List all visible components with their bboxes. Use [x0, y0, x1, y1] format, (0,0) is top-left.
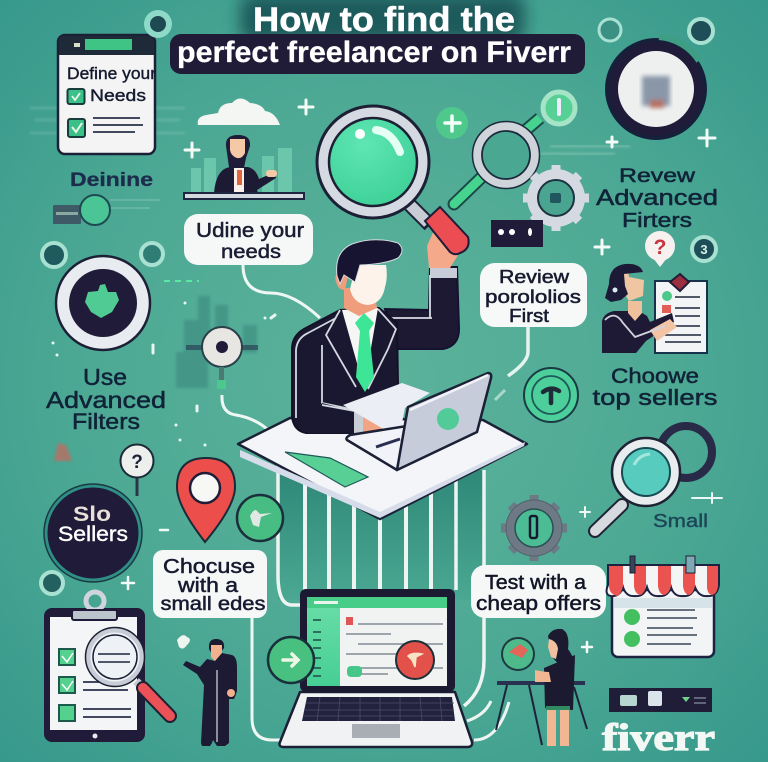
title line one: How to find the — [253, 1, 515, 39]
text: use advanced filters: Filters — [72, 409, 140, 434]
trackpad — [352, 724, 400, 738]
callout: review portfolios first bubble: Review — [499, 267, 570, 287]
decorative dots — [53, 303, 275, 445]
text: review advanced filters: Revew — [619, 166, 695, 187]
offer bubble — [502, 638, 534, 670]
panel: woman at table — [496, 629, 587, 746]
badge: small left — [41, 572, 63, 594]
panel: clipboard with magnifier — [44, 592, 170, 742]
hand on handle — [427, 228, 460, 268]
magnifier on clipboard — [136, 681, 144, 689]
text: use advanced filters: Advanced — [46, 387, 166, 413]
badges: small top right — [599, 19, 713, 43]
icon: red alert badge — [396, 641, 434, 679]
head — [335, 273, 348, 290]
table — [497, 681, 585, 685]
callout: review portfolios first bubble: First — [509, 306, 549, 326]
panel: define your needs checklist card: Define your — [67, 64, 156, 83]
figure — [547, 706, 556, 746]
callout: choose with a small order bubble: small edes — [160, 594, 266, 615]
tie — [355, 313, 374, 392]
icon: question pin: ? — [131, 452, 143, 473]
icon: settings gear — [523, 165, 589, 231]
bar chart backdrop — [191, 148, 292, 193]
text: review advanced filters: Firters — [622, 210, 692, 232]
label: small: Small — [653, 511, 708, 531]
arrow: connector lens to desk — [222, 395, 267, 429]
text: use advanced filters — [46, 364, 166, 434]
awning — [607, 565, 719, 596]
panel: cloud and presenter — [184, 98, 313, 199]
shelf — [184, 193, 304, 199]
checkbox list — [59, 649, 75, 721]
icon: question speech bubble: ? — [654, 236, 666, 259]
callout: test with cheap offers bubble: Test with a — [485, 572, 587, 594]
panel: desk legs backdrop and legs — [278, 460, 509, 740]
badge: step three: 3 — [700, 242, 708, 257]
document — [655, 281, 707, 353]
arrow: connector from define bubble — [243, 265, 320, 318]
arrow: connector from review bubble — [508, 327, 528, 376]
keyboard — [302, 697, 455, 721]
icon: green question badge — [524, 368, 578, 422]
text: choose top sellers: Choowe — [611, 365, 699, 388]
woman figure — [602, 311, 674, 353]
arrow: connector from choose bubble — [252, 618, 286, 740]
panel: define your needs checklist card — [30, 35, 185, 154]
icon: cloud — [198, 98, 280, 125]
panel: define your needs checklist card: Needs — [90, 86, 146, 105]
panel: sellers badge: Sellers — [58, 523, 128, 546]
icon: teal magnifying glass — [595, 426, 712, 531]
badge: step one top — [144, 10, 172, 38]
shirt and neck — [342, 308, 378, 388]
badge: step three — [692, 237, 716, 261]
torso and jacket — [292, 308, 398, 433]
icon: desk laptop — [346, 373, 491, 470]
callout: define your needs bubble: needs — [221, 242, 281, 263]
icon: faded city chart and lens — [176, 296, 258, 389]
icon: dark dotted box — [491, 220, 543, 247]
person presenter — [214, 135, 277, 193]
panel: sellers badge: Slo — [73, 503, 111, 526]
panel: main laptop — [280, 589, 472, 747]
icon: paper sheet on desk — [343, 383, 430, 438]
icon: lock gear — [501, 495, 567, 561]
text: choose top sellers — [592, 365, 718, 410]
icon: dark badges strip — [609, 688, 712, 712]
panel: desk top — [238, 418, 527, 519]
callout: choose with a small order bubble: Chocuse — [163, 556, 255, 578]
person: man with thought — [177, 635, 237, 746]
heading: define: Deinine — [70, 170, 153, 191]
title banner — [170, 0, 585, 74]
text: review advanced filters — [596, 166, 718, 232]
icon: big magnifying glass — [317, 106, 430, 225]
callout: test with cheap offers bubble: cheap offers — [476, 593, 601, 615]
panel: storefront card — [607, 556, 719, 657]
callout: test with cheap offers bubble — [471, 565, 606, 618]
sparkles right — [595, 130, 715, 254]
icon: map pin — [177, 458, 235, 542]
icon: green arrow badge — [268, 637, 314, 683]
arm raised — [385, 267, 459, 349]
callout: choose with a small order bubble — [153, 550, 267, 618]
text: choose top sellers: top sellers — [592, 385, 718, 410]
title line two: perfect freelancer on Fiverr — [177, 36, 571, 69]
icon: question speech bubble — [645, 231, 675, 267]
panel: woman reviewing document — [602, 264, 707, 353]
panel: sellers badge — [44, 484, 142, 582]
badges: step two left — [42, 243, 163, 267]
icon: faded red flag — [54, 443, 72, 461]
logo: fiverr: fiverr — [602, 717, 715, 759]
icon: green action badge — [237, 495, 283, 541]
list blobs — [624, 609, 640, 625]
hair — [337, 240, 402, 284]
text: review advanced filters: Advanced — [596, 185, 718, 210]
forearm cuff and hand — [307, 403, 357, 433]
icon: slider widget — [53, 195, 160, 225]
icon: advanced filter dial — [56, 256, 150, 350]
panel: man at desk — [292, 207, 469, 433]
text: use advanced filters: Use — [83, 364, 127, 390]
callout: review portfolios first bubble: porololios — [485, 287, 581, 307]
paper on desk — [285, 452, 368, 487]
icon: plus badge — [436, 107, 468, 139]
callout: define your needs bubble: Udine your — [196, 220, 304, 242]
icon: question pin — [120, 444, 154, 496]
callout: define your needs bubble — [184, 214, 313, 265]
callout: review portfolios first bubble — [480, 263, 587, 327]
callout: choose with a small order bubble: with a — [177, 575, 239, 597]
icon: gear magnifier — [454, 92, 575, 204]
icon: review dial — [607, 37, 705, 138]
